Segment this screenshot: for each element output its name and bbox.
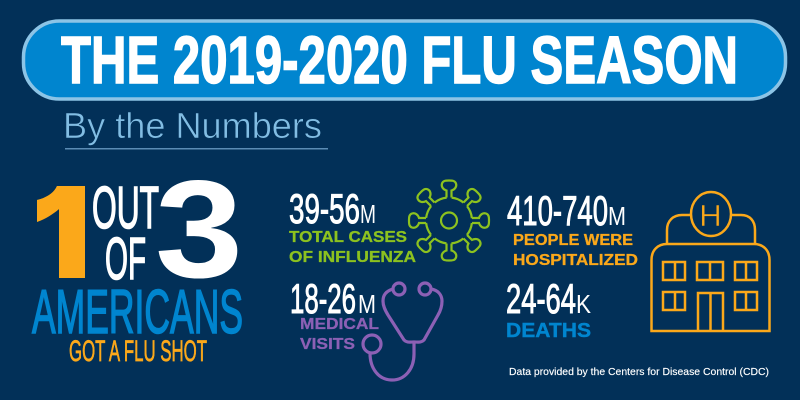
icon: virus xyxy=(409,180,489,260)
stat: hospitalized: 410-740 xyxy=(507,187,608,234)
stat: hospitalized: M xyxy=(608,201,626,231)
stat: total cases: TOTAL CASES xyxy=(289,229,407,246)
numeral 3: 3 xyxy=(155,152,243,307)
stat: total cases: M xyxy=(360,199,376,229)
stat: hospitalized xyxy=(507,187,638,269)
stat: hospitalized: PEOPLE WERE xyxy=(513,232,633,249)
out: OUT xyxy=(92,175,159,241)
panel: 1 out of 3 Americans xyxy=(31,180,242,362)
icon: hospital: H xyxy=(699,198,722,233)
stat: hospitalized: HOSPITALIZED xyxy=(513,252,638,269)
source note: Data provided by the Centers for Disease Control (CDC) xyxy=(509,366,769,378)
stat: deaths: DEATHS xyxy=(506,320,591,342)
of: OF xyxy=(105,226,146,292)
icon: stethoscope xyxy=(363,283,442,380)
stat: total cases: OF INFLUENZA xyxy=(289,249,416,266)
stat: medical visits xyxy=(290,275,379,353)
stat: medical visits: M xyxy=(358,289,376,319)
got a flu shot: GOT A FLU SHOT xyxy=(69,335,207,368)
stat: total cases: 39-56 xyxy=(289,185,360,232)
subtitle: By the Numbers xyxy=(63,105,322,146)
stat: medical visits: 18-26 xyxy=(290,275,356,322)
numeral 1: 1 xyxy=(22,158,100,307)
stat: deaths: 24-64 xyxy=(506,275,576,322)
stat: medical visits: MEDICAL xyxy=(300,316,379,333)
stat: medical visits: VISITS xyxy=(300,336,355,353)
icon: hospital xyxy=(652,192,770,331)
stat: deaths: K xyxy=(576,289,592,319)
stat: total cases xyxy=(289,185,416,266)
stat: deaths xyxy=(506,275,592,342)
americans: AMERICANS xyxy=(32,278,243,347)
